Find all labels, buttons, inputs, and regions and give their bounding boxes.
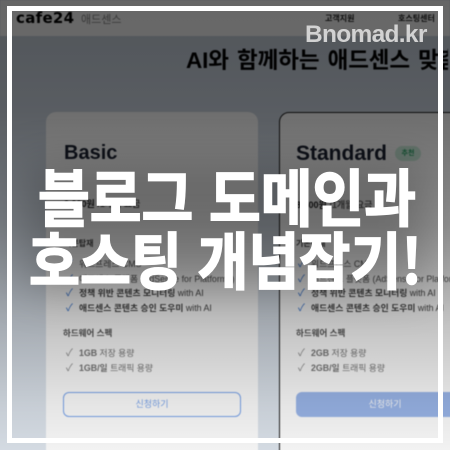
spec: traffic: ✓ bbox=[66, 363, 73, 374]
feature: monitoring: ✓ bbox=[298, 288, 305, 299]
spec: storage: ✓ bbox=[66, 348, 73, 359]
feature: approval: ✓ bbox=[66, 303, 73, 314]
feature: cms: ✓ bbox=[298, 259, 305, 270]
features heading: 기본탑재 bbox=[64, 239, 93, 248]
feature: platform: ✓ bbox=[66, 274, 73, 285]
feature: approval: 애드센스 콘텐츠 승인 도우미 with AI bbox=[311, 303, 444, 313]
feature: platform: 애드센스 플랫폼 (AdSense for Platforms) bbox=[79, 274, 234, 284]
plan name: Basic bbox=[64, 142, 117, 164]
hardware heading: 하드웨어 스펙 bbox=[296, 328, 345, 338]
feature: monitoring: ✓ bbox=[66, 288, 73, 299]
feature: monitoring: 정책 위반 콘텐츠 모니터링 with AI bbox=[79, 288, 204, 298]
title line 1: 블로그 도메인과 bbox=[38, 149, 416, 239]
features heading: 기본탑재 bbox=[296, 239, 325, 248]
panel: Standard plan bbox=[279, 112, 450, 450]
logo: cafe24 bbox=[16, 9, 74, 27]
plan price: 0,000원 /1개월 요금 bbox=[64, 199, 140, 209]
logo subtitle: 애드센스 bbox=[81, 14, 121, 26]
apply button: 신청하기 bbox=[135, 399, 169, 409]
spec: storage: 1GB 저장 용량 bbox=[79, 348, 134, 358]
apply button bbox=[296, 392, 450, 417]
feature: platform: ✓ bbox=[298, 274, 305, 285]
feature: approval: ✓ bbox=[298, 303, 305, 314]
top navigation bar bbox=[0, 0, 450, 36]
spec: storage: ✓ bbox=[298, 348, 305, 359]
nav link support: 고객지원 bbox=[325, 14, 354, 23]
soft shadow behind title bbox=[25, 165, 425, 290]
apply button: 신청하기 bbox=[368, 399, 402, 409]
spec: traffic: 1GB/일 트래픽 용량 bbox=[79, 363, 153, 373]
spec: traffic: ✓ bbox=[298, 363, 305, 374]
apply button bbox=[63, 392, 241, 417]
panel: Basic plan bbox=[46, 112, 258, 450]
feature: approval: 애드센스 콘텐츠 승인 도우미 with AI bbox=[79, 303, 212, 313]
feature: cms: ✓ bbox=[66, 259, 73, 270]
nav link hosting: 호스팅센터 bbox=[398, 14, 435, 23]
spec: storage: 2GB 저장 용량 bbox=[311, 348, 366, 358]
plan name: Standard bbox=[296, 142, 387, 165]
feature: monitoring: 정책 위반 콘텐츠 모니터링 with AI bbox=[311, 288, 436, 298]
recommended badge: 추천 bbox=[402, 150, 414, 157]
watermark: Bnomad.kr bbox=[305, 21, 427, 48]
hardware heading: 하드웨어 스펙 bbox=[63, 328, 112, 338]
recommended badge bbox=[395, 146, 421, 161]
plan price: 8,500원 /1개월 요금 bbox=[296, 200, 372, 210]
feature: cms: 워드프레스 CMS bbox=[311, 259, 373, 269]
feature: cms: 워드프레스 CMS bbox=[79, 259, 141, 269]
spec: traffic: 2GB/일 트래픽 용량 bbox=[311, 363, 385, 373]
